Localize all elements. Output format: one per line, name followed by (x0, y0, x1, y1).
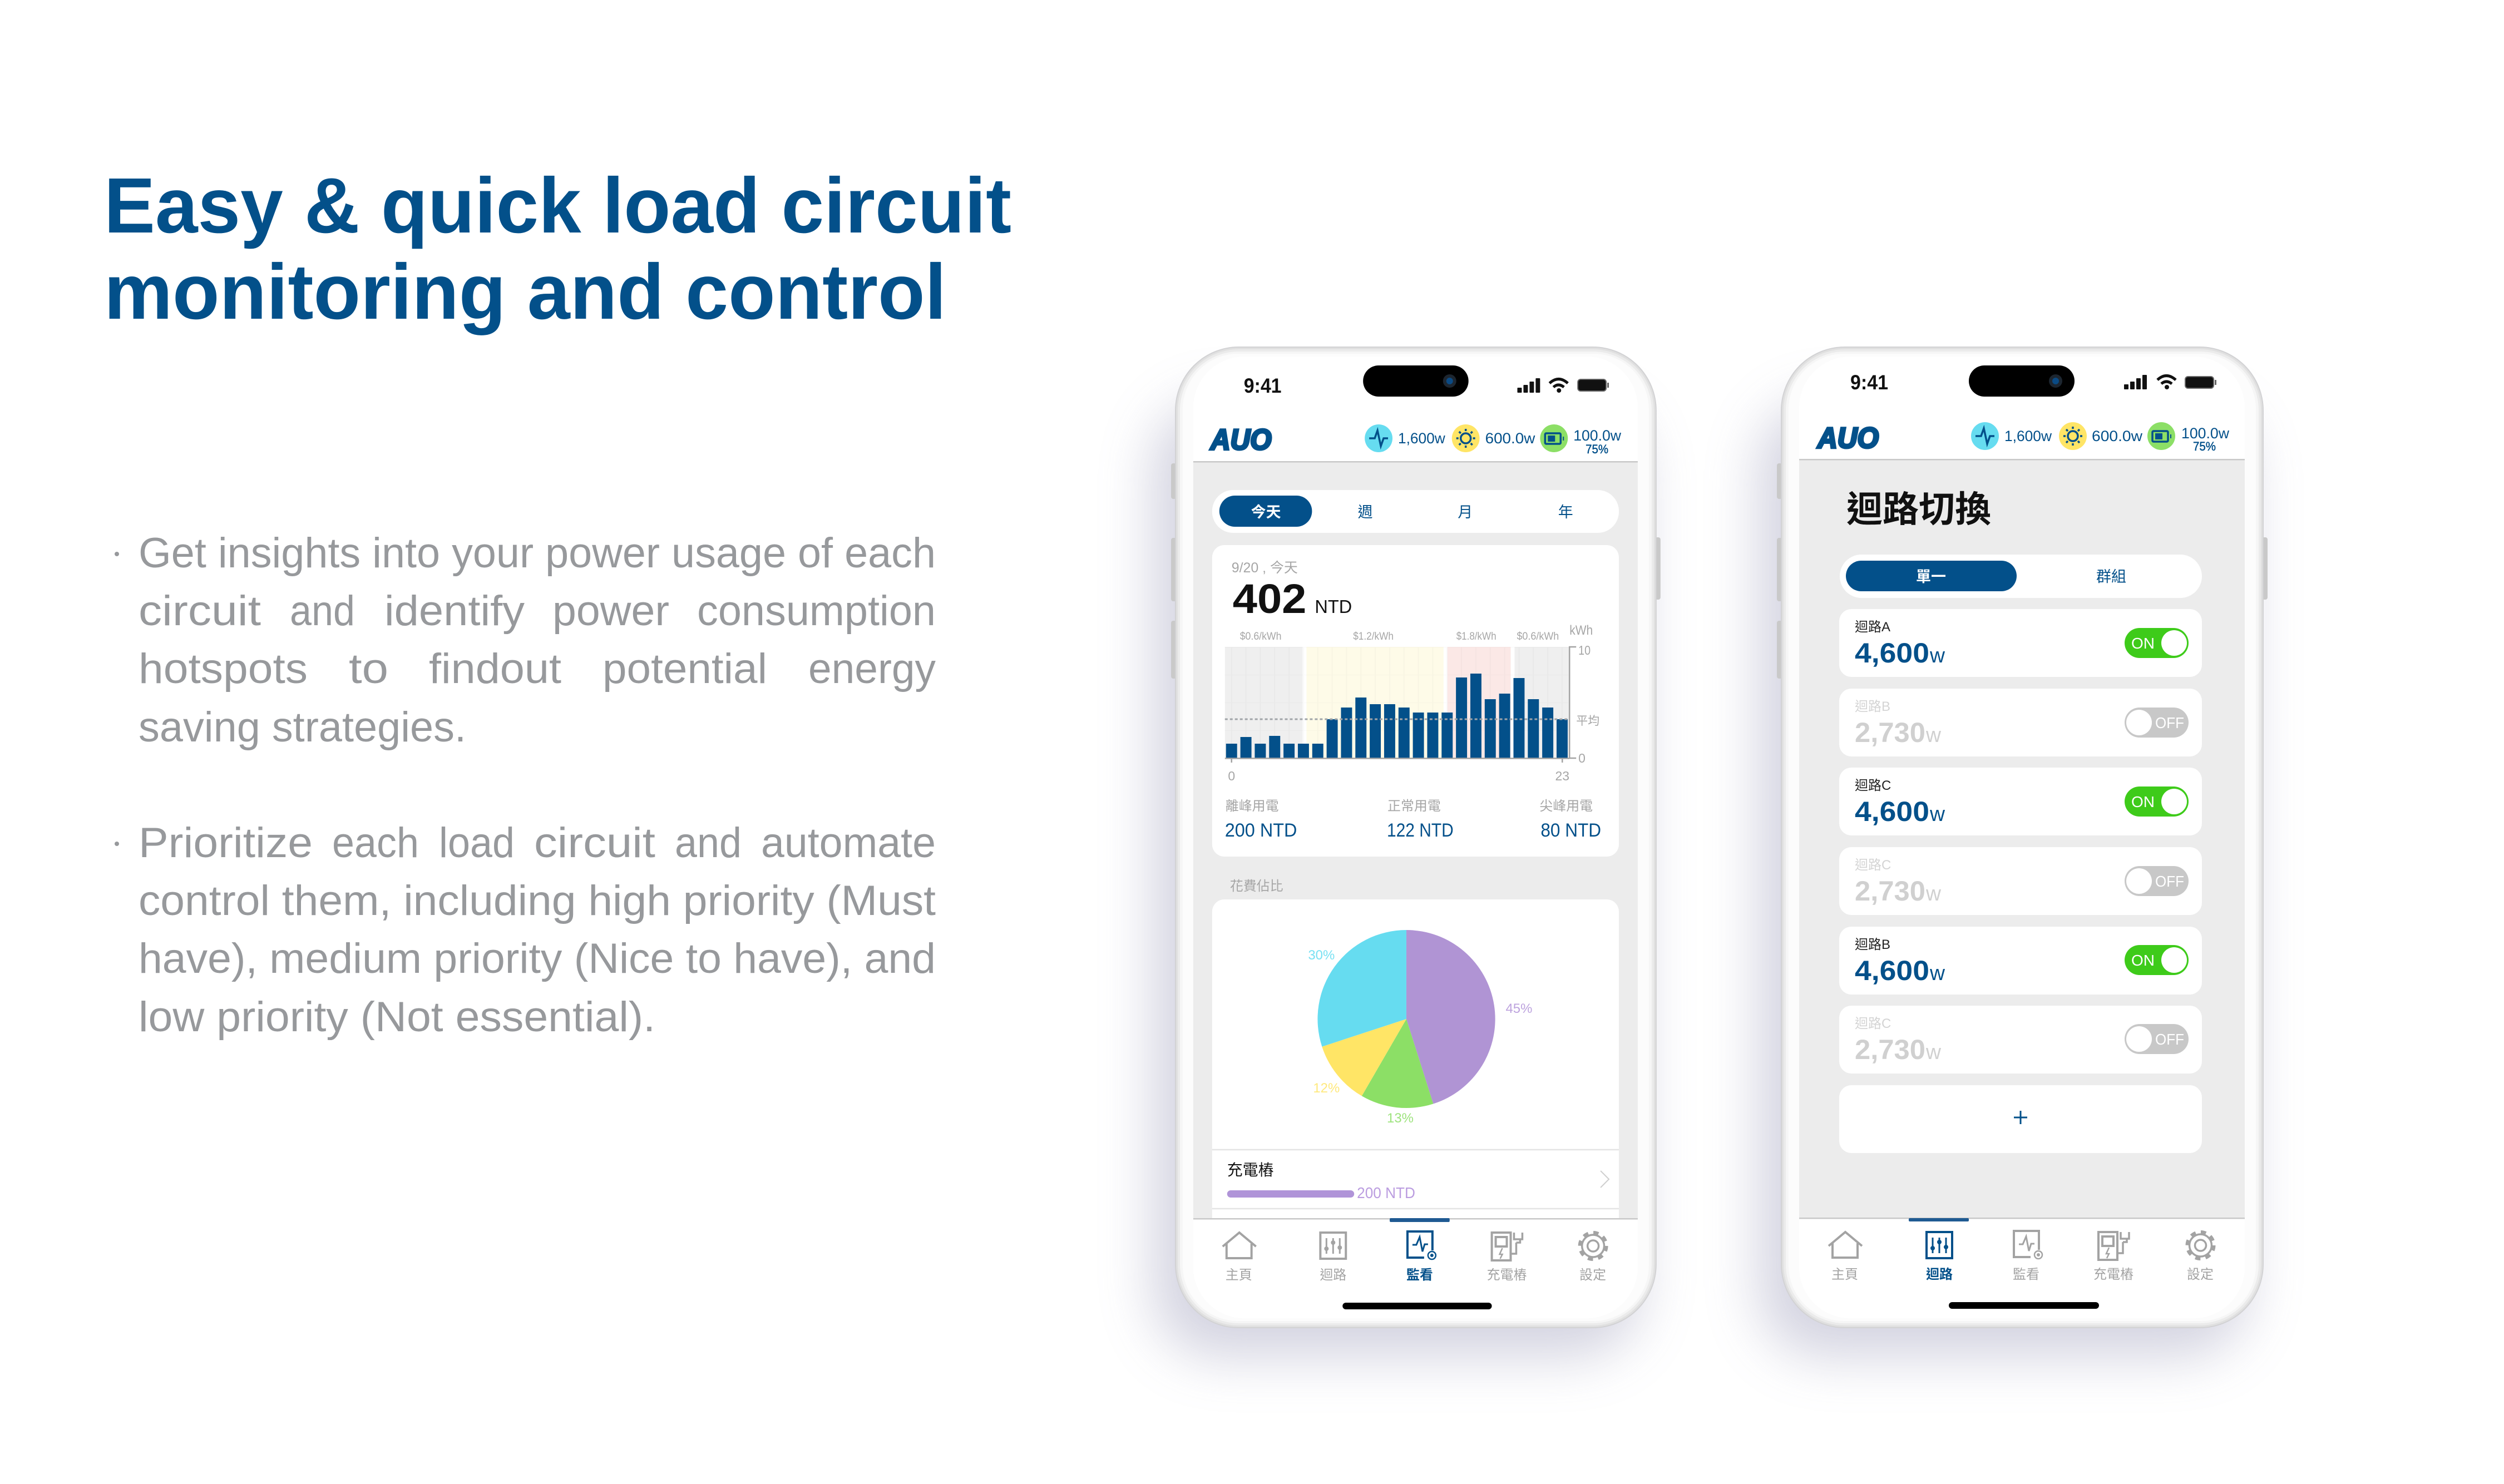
period tabs (1212, 490, 1619, 533)
circuit row: A on (1839, 609, 2202, 677)
circuit row: C off: 2,730 (1855, 875, 1925, 907)
panel: daily usage card (1212, 545, 1619, 857)
text block: first bullet (115, 530, 936, 751)
bar chart: hourly usage: $1.2/kWh (1353, 631, 1394, 642)
bar chart: hourly usage (1225, 623, 1599, 783)
bottom navigation: 充電樁 (1487, 1268, 1527, 1283)
text block: second bullet: low priority (Not essential). (139, 993, 655, 1041)
period tabs: 週 (1358, 504, 1373, 521)
bottom navigation (1193, 1218, 1638, 1318)
period tabs: 月 (1458, 504, 1473, 521)
title: monitoring and control (104, 248, 946, 335)
status bar: 9:41 (1244, 374, 1282, 397)
text block: second bullet: Prioritize (139, 819, 313, 867)
panel: right phone, circuit switch screen (1759, 347, 2268, 1357)
circuit row: B off: OFF (2155, 714, 2184, 731)
pie chart: 30% (1308, 948, 1335, 963)
cost summary: 正常用電 (1387, 799, 1441, 814)
pie chart: 12% (1313, 1081, 1340, 1096)
bar chart: hourly usage: $0.6/kWh (1517, 631, 1559, 642)
screen background (1193, 462, 1638, 1219)
bottom navigation: 迴路 (1926, 1267, 1953, 1282)
text block: second bullet: circuit (534, 819, 655, 867)
mode tabs: 單一 (1916, 568, 1946, 585)
text block: first bullet: energy (808, 645, 936, 692)
panel: cost share card (1212, 899, 1619, 1219)
title (104, 161, 1011, 335)
mode tabs: 群組 (2096, 568, 2126, 585)
header: logo and power readings (1209, 424, 1622, 456)
header: logo and power readings: 100.0w (1573, 427, 1622, 444)
bottom navigation: 設定 (1579, 1268, 1606, 1283)
circuit row: C on: w (1929, 803, 1945, 826)
cost summary (1225, 799, 1601, 841)
circuit row: C off: 迴路C (1855, 1016, 1891, 1031)
circuit row: C on: 迴路C (1855, 778, 1891, 793)
heading: cost share: 花費佔比 (1230, 879, 1283, 894)
text block: first bullet: to (349, 645, 388, 692)
circuit row: B off: 迴路B (1855, 699, 1890, 714)
text block: first bullet: consumption (697, 587, 936, 635)
cost summary: 122 NTD (1387, 820, 1454, 841)
header: logo and power readings: AUO (1209, 424, 1272, 456)
bar chart: hourly usage: 23 (1555, 769, 1569, 783)
text block: first bullet: power (552, 587, 669, 635)
circuit row: B off: 2,730 (1855, 717, 1925, 748)
header: logo and power readings: 1,600w (1398, 430, 1445, 447)
header: logo and power readings: 600.0w (1485, 430, 1535, 447)
bottom navigation: 主頁 (1831, 1267, 1858, 1282)
screen heading: 迴路切換 (1846, 489, 1991, 530)
text block: second bullet (115, 819, 936, 1041)
circuit row: B on (1839, 927, 2202, 995)
side buttons (1171, 463, 1661, 679)
text block: second bullet: each (332, 819, 419, 867)
circuit row: C off: 2,730 (1855, 1034, 1925, 1065)
circuit row: A on: 迴路A (1855, 620, 1890, 635)
circuit row: C off (1839, 847, 2202, 915)
text block: first bullet: findout (429, 645, 561, 692)
panel: daily usage card: 402 (1233, 576, 1306, 622)
pie chart: 45% (1505, 1001, 1532, 1016)
status bar: 9:41 (1850, 371, 1888, 394)
circuit row: B on: 4,600 (1855, 955, 1929, 986)
text block: first bullet: circuit (139, 587, 261, 635)
bottom navigation: 迴路 (1320, 1268, 1346, 1283)
bottom navigation: 主頁 (1226, 1268, 1252, 1283)
circuit row: A on: 4,600 (1855, 637, 1929, 669)
header: logo and power readings: 600.0w (2092, 428, 2143, 444)
bottom navigation: 監看 (2013, 1267, 2039, 1282)
text block: first bullet: and (290, 587, 355, 635)
circuit row: B on: ON (2131, 952, 2155, 969)
cost summary: 尖峰用電 (1539, 799, 1593, 814)
circuit row: A on: ON (2131, 635, 2155, 652)
screen background (1799, 459, 2245, 1218)
circuit row: B on: w (1929, 962, 1945, 985)
circuit row: C on (1839, 768, 2202, 835)
cost summary: 離峰用電 (1226, 799, 1279, 814)
bar chart: hourly usage: 0 (1228, 769, 1235, 783)
circuit row: B on: 迴路B (1855, 937, 1890, 952)
bar chart: hourly usage: $0.6/kWh (1240, 631, 1282, 642)
text block: second bullet: load (439, 819, 515, 867)
bottom navigation: 監看 (1406, 1268, 1433, 1283)
period tabs: 年 (1558, 504, 1573, 521)
header: logo and power readings (1816, 422, 2229, 454)
period tabs: 今天 (1251, 504, 1281, 521)
text block: second bullet: have), medium priority (Nice to have), and (139, 935, 936, 982)
bar chart: hourly usage: kWh (1569, 623, 1593, 638)
circuit row: C off: 迴路C (1855, 858, 1891, 873)
circuit row: C on: 4,600 (1855, 796, 1929, 827)
status bar (1850, 365, 2216, 397)
circuit row: B off: w (1925, 724, 1942, 747)
pie chart: 13% (1387, 1111, 1414, 1126)
text block: first bullet: hotspots (139, 645, 308, 692)
side buttons (1777, 463, 2268, 679)
pie chart (1308, 930, 1532, 1126)
circuit row: C off (1839, 1006, 2202, 1074)
bar chart: hourly usage: 0 (1578, 751, 1586, 765)
bar chart: hourly usage: 平均 (1576, 715, 1599, 728)
circuit row: C on: ON (2131, 793, 2155, 810)
circuit row: C off: OFF (2155, 1031, 2184, 1048)
add circuit button (1839, 1085, 2202, 1153)
cost summary: 200 NTD (1225, 820, 1297, 841)
header: logo and power readings: 1,600w (2004, 428, 2052, 444)
bottom navigation (1799, 1218, 2245, 1318)
circuit row: C off: w (1925, 882, 1942, 906)
header: logo and power readings: 75% (1586, 442, 1608, 456)
text block: first bullet: saving strategies. (139, 704, 466, 751)
cost summary: 80 NTD (1540, 820, 1601, 841)
header: logo and power readings: 75% (2193, 439, 2216, 453)
status bar (1244, 365, 1609, 397)
list row: charger: 200 NTD (1357, 1184, 1415, 1201)
panel: daily usage card: NTD (1315, 596, 1352, 617)
circuit row: C off: OFF (2155, 873, 2184, 890)
text block: first bullet: identify (384, 587, 525, 635)
header: logo and power readings: 100.0w (2181, 425, 2229, 442)
bottom navigation: 設定 (2187, 1267, 2214, 1282)
panel: left phone, monitoring screen (1153, 347, 1661, 1357)
text block: first bullet: Get insights into your power usage of each (139, 530, 936, 577)
mode tabs (1840, 555, 2202, 598)
list row: charger: 充電樁 (1227, 1161, 1274, 1179)
circuit row: C off: w (1925, 1041, 1942, 1064)
list row: charger (1227, 1161, 1609, 1201)
bar chart: hourly usage: 10 (1578, 643, 1591, 657)
title: Easy & quick load circuit (104, 161, 1011, 249)
text block: second bullet: control them, including high priority (Must (139, 877, 936, 924)
text block: second bullet: automate (761, 819, 936, 867)
bar chart: hourly usage: $1.8/kWh (1456, 631, 1497, 642)
text block: first bullet: potential (602, 645, 767, 692)
bottom navigation: 充電樁 (2093, 1267, 2133, 1282)
circuit row: A on: w (1929, 644, 1945, 667)
circuit row: B off (1839, 689, 2202, 756)
header: logo and power readings: AUO (1816, 422, 1879, 454)
panel: daily usage card: 9/20 , 今天 (1232, 560, 1298, 576)
text block: second bullet: and (675, 819, 742, 867)
